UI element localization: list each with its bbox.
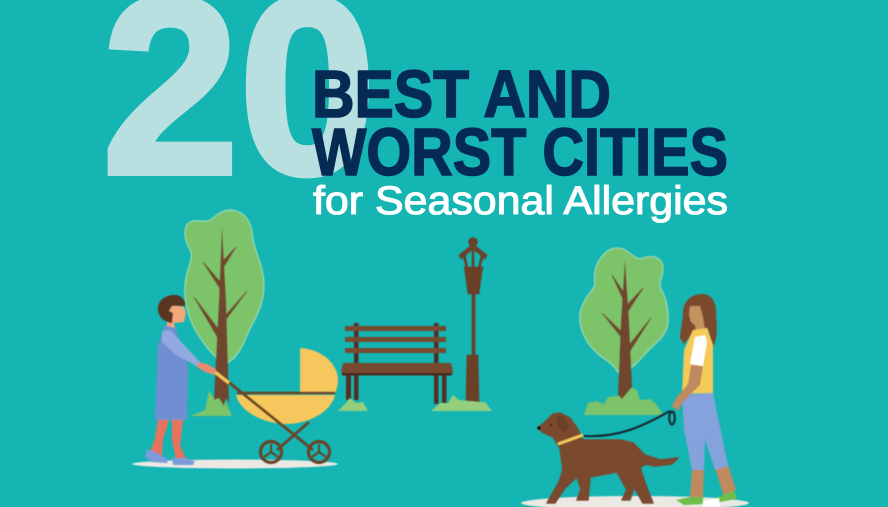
right tree: [580, 248, 668, 415]
grass tufts by bench: [338, 395, 492, 411]
right ground shadow: [521, 496, 749, 507]
bench: [341, 323, 453, 404]
title: WORST CITIES: [312, 115, 728, 190]
leash: [584, 411, 675, 436]
left tree: [185, 210, 264, 416]
title: BEST AND: [312, 57, 611, 132]
left ground shadow: [132, 460, 338, 468]
woman with stroller: [145, 295, 216, 465]
lamp post: [459, 238, 487, 402]
subtitle: for Seasonal Allergies: [313, 179, 728, 223]
dog: [537, 413, 678, 503]
woman walking dog: [672, 294, 737, 507]
title: [312, 57, 728, 190]
stroller: [215, 348, 338, 462]
